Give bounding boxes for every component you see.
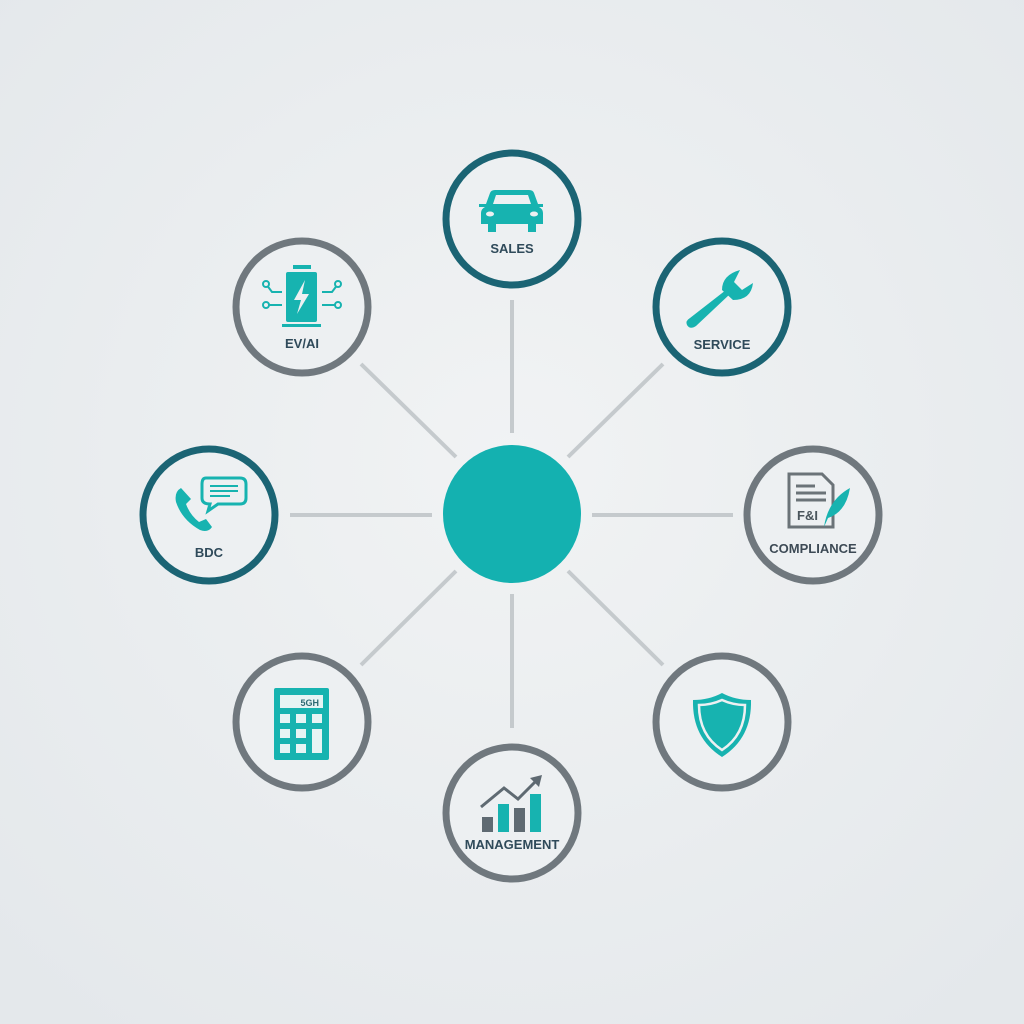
label: sales: SALES <box>490 241 534 256</box>
icon: battery with circuits <box>263 265 341 327</box>
connector lines <box>290 300 733 728</box>
center hub <box>443 445 581 583</box>
icon: phone and chat <box>176 478 246 531</box>
node: service <box>656 241 788 373</box>
icon: calculator: 5GH <box>300 698 319 708</box>
label: compliance: COMPLIANCE <box>769 541 857 556</box>
icon: document with quill: F&I <box>797 508 818 523</box>
node: shield <box>656 656 788 788</box>
label: service: SERVICE <box>694 337 751 352</box>
node: bdc <box>143 449 275 581</box>
label: ev/ai: EV/AI <box>285 336 319 351</box>
icon: wrench <box>686 270 753 328</box>
icon: growth chart <box>481 775 542 832</box>
label: bdc: BDC <box>195 545 224 560</box>
label: management: MANAGEMENT <box>465 837 559 852</box>
icon: car <box>479 190 543 232</box>
node: compliance <box>747 449 879 581</box>
node: calculator <box>236 656 368 788</box>
node: ev/ai <box>236 241 368 373</box>
icon: shield <box>693 693 751 757</box>
node: management <box>446 747 578 879</box>
node: sales <box>446 153 578 285</box>
